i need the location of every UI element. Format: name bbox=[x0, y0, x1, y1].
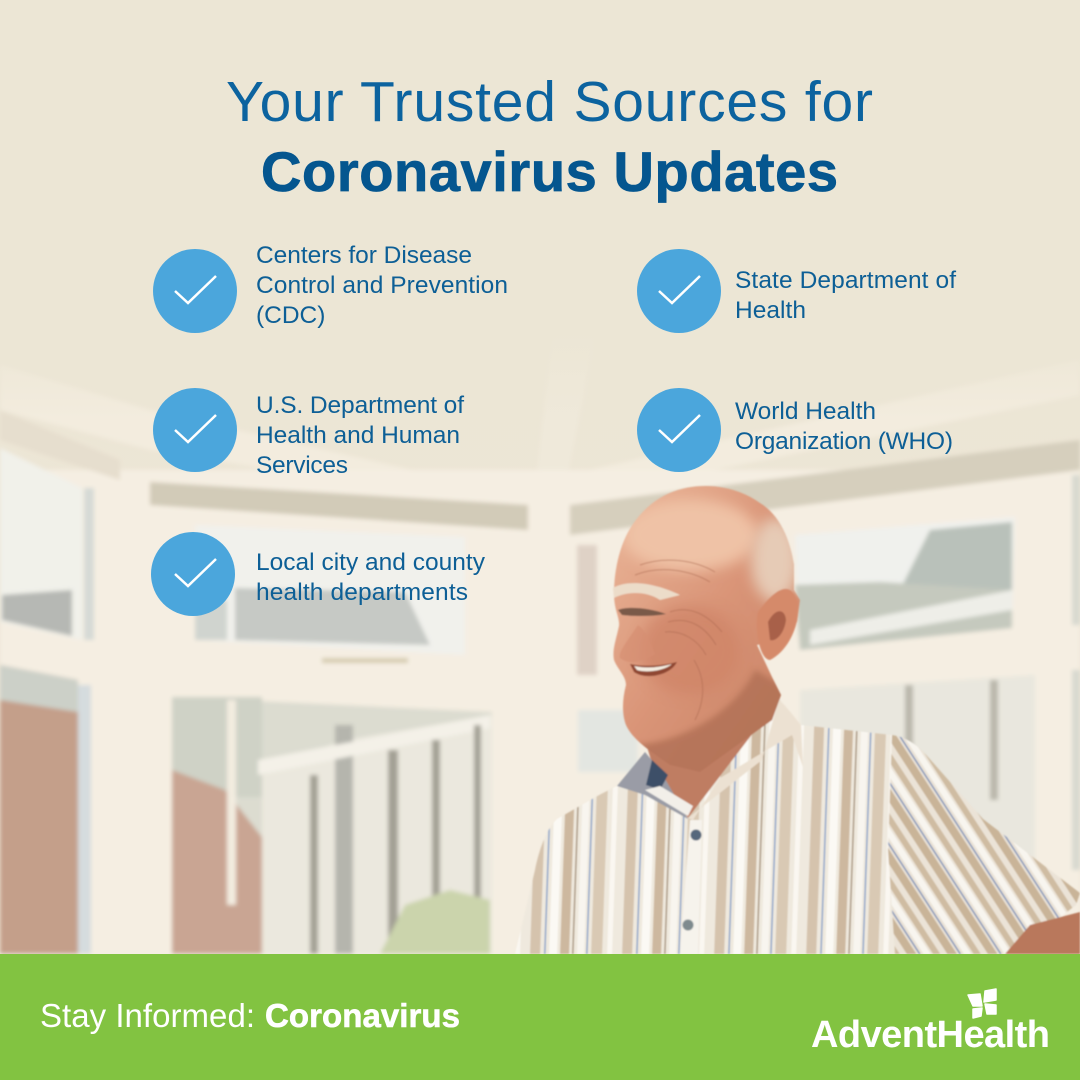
shirt placket bbox=[680, 820, 702, 954]
footer text: Coronavirus bbox=[265, 997, 460, 1034]
label: HHS: Services bbox=[256, 452, 348, 479]
mid lower pane bbox=[235, 700, 492, 835]
open collar bbox=[617, 752, 688, 819]
footer banner bbox=[0, 954, 1080, 1080]
label: WHO: Organization (WHO) bbox=[735, 428, 953, 455]
title bbox=[226, 70, 873, 203]
icon: flower bbox=[968, 989, 996, 1018]
man portrait bbox=[515, 480, 1080, 954]
label: CDC: Centers for Disease bbox=[256, 242, 472, 269]
window frames base bbox=[0, 470, 1080, 960]
label: local departments: Local city and county bbox=[256, 549, 486, 576]
list item: WHO bbox=[637, 388, 953, 472]
shirt sleeve bbox=[888, 735, 1080, 954]
forearm bbox=[1005, 912, 1080, 954]
list item: State Department of Health bbox=[637, 249, 963, 333]
jaw shadow bbox=[642, 670, 781, 772]
list item: CDC bbox=[153, 242, 515, 333]
icon: check badge bbox=[153, 249, 237, 333]
window latch bbox=[322, 658, 408, 663]
shirt torso bbox=[515, 699, 905, 954]
cheek flush bbox=[642, 604, 734, 690]
list item: HHS bbox=[153, 388, 471, 479]
label: CDC: Control and Prevention bbox=[256, 272, 508, 299]
ceiling seams bbox=[535, 0, 660, 490]
right upper pane bbox=[796, 518, 1013, 584]
icon: check badge bbox=[637, 249, 721, 333]
neck bbox=[647, 734, 752, 818]
label: CDC: (CDC) bbox=[256, 302, 325, 329]
eye bbox=[618, 608, 666, 616]
label: local departments: health departments bbox=[256, 579, 468, 606]
icon: check badge bbox=[151, 532, 235, 616]
icon: check badge bbox=[637, 388, 721, 472]
mouth bbox=[630, 662, 677, 676]
list item: local health departments bbox=[151, 532, 492, 616]
logo: AdventHealth bbox=[811, 989, 1050, 1056]
right narrow panes bbox=[577, 545, 597, 675]
right lower pane bbox=[800, 675, 1035, 860]
lower left pane bbox=[0, 665, 78, 954]
mid upper pane bbox=[195, 525, 465, 655]
blinds bbox=[150, 482, 528, 530]
buttons bbox=[690, 830, 702, 840]
label: state department: Health bbox=[735, 297, 806, 324]
label: HHS: Health and Human bbox=[256, 422, 460, 449]
icon: check badge bbox=[153, 388, 237, 472]
ear bbox=[757, 589, 798, 660]
wordmark: AdventHealth bbox=[811, 1014, 1050, 1056]
footer text: Stay Informed: bbox=[40, 997, 255, 1034]
upper left pane bbox=[0, 449, 76, 634]
label: state department: State Department of bbox=[735, 267, 956, 294]
blind cord bbox=[227, 700, 236, 905]
label: HHS: U.S. Department of bbox=[256, 392, 464, 419]
label: WHO: World Health bbox=[735, 398, 876, 425]
eyebrow bbox=[613, 583, 680, 600]
title: Your Trusted Sources for bbox=[226, 70, 873, 134]
cheek wrinkles bbox=[635, 560, 722, 720]
head bbox=[612, 485, 801, 770]
nose shadow bbox=[620, 626, 640, 661]
scalp highlight bbox=[622, 499, 758, 571]
background photo: sunroom bbox=[0, 411, 1080, 954]
title: Coronavirus Updates bbox=[261, 140, 838, 203]
